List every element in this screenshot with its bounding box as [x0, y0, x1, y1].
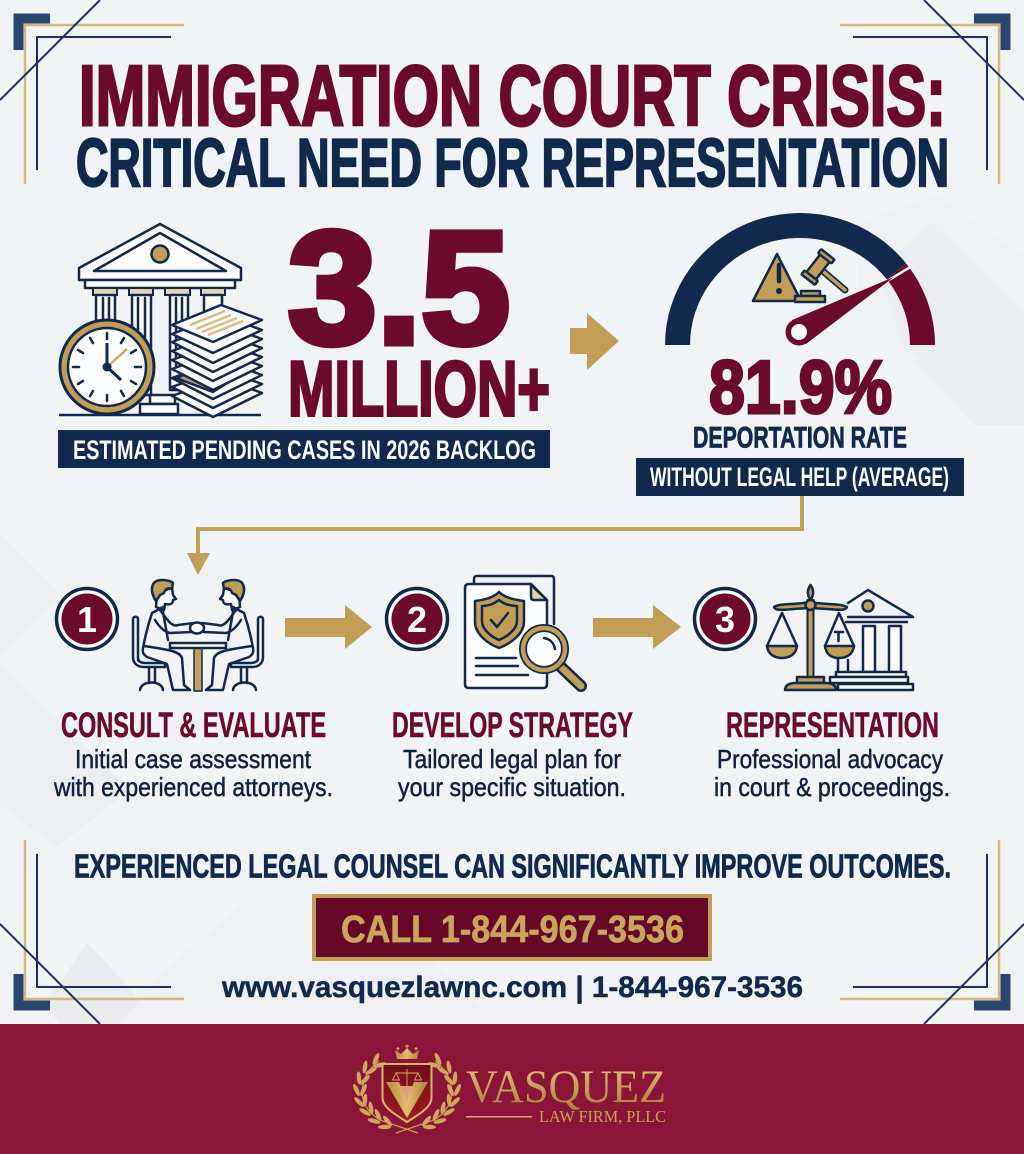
stat: 81.9% deportation rate: [693, 345, 907, 454]
small courthouse: [830, 590, 913, 690]
corner frame: bottom right: [840, 840, 1024, 1024]
step 2 text: your specific situation.: [398, 772, 626, 802]
step 2 badge: [386, 588, 448, 650]
clasped hands: [190, 622, 204, 634]
step 3 badge: 3: [715, 599, 735, 640]
scales: [767, 585, 854, 690]
right person: [202, 580, 263, 690]
call button: CALL 1-844-967-3536: [341, 909, 684, 951]
corner frame: top right: [840, 0, 1024, 184]
step 1 text: [53, 706, 333, 802]
step 3 text: in court & proceedings.: [714, 772, 950, 802]
step 1 badge: 1: [77, 599, 97, 640]
paper stack: [172, 305, 262, 417]
courthouse: [79, 224, 241, 414]
step 1 text: Initial case assessment: [75, 744, 312, 774]
step 3 text: [714, 706, 950, 802]
step 1 text: CONSULT & EVALUATE: [61, 706, 326, 745]
banner: estimated pending cases: [58, 430, 550, 468]
step 3 badge: [694, 588, 756, 650]
step 1 badge: [56, 588, 118, 650]
icon: scales of justice and courthouse: [767, 585, 913, 690]
firm name: VASQUEZ: [466, 1061, 666, 1113]
ground line: [59, 414, 261, 416]
clock: [60, 320, 154, 414]
gauge arc: red: [896, 271, 922, 345]
needle: [786, 277, 894, 346]
gauge arc: navy: [678, 226, 896, 345]
stat: 81.9% deportation rate: DEPORTATION RATE: [693, 422, 907, 454]
arrow: step 1 to 2: [285, 605, 372, 649]
step 2 text: Tailored legal plan for: [403, 744, 621, 774]
big number: 3.5 million+: MILLION+: [288, 344, 550, 432]
step 2 badge: 2: [407, 599, 427, 640]
laurel right: [396, 1052, 462, 1133]
gauge: [678, 226, 922, 346]
website and phone: www.vasquezlawnc.com | 1-844-967-3536: [221, 971, 803, 1004]
arrow: step 2 to 3: [593, 605, 681, 649]
table: [170, 643, 226, 691]
banner: estimated pending cases: ESTIMATED PENDING CASES IN 2026 BACKLOG: [73, 435, 536, 465]
icon: handshake at table: [133, 580, 263, 691]
arrow: stat to gauge: [570, 313, 619, 370]
icon: courthouse, clock and paper stack: [59, 224, 262, 417]
shield scales and column: [392, 1069, 422, 1102]
big number: 3.5 million+: [288, 198, 550, 432]
magnifier: [523, 628, 581, 686]
logo: [352, 1044, 462, 1133]
step 2 text: [392, 706, 633, 802]
step 2 text: DEVELOP STRATEGY: [392, 706, 633, 745]
step 3 text: Professional advocacy: [717, 744, 943, 774]
big number: 3.5 million+: 3.5: [288, 198, 510, 377]
connector arrow to steps: [187, 496, 802, 575]
icon: document, shield and magnifier: [465, 576, 581, 688]
shield: [382, 1064, 432, 1122]
shield V: [386, 1082, 428, 1118]
firm name: LAW FIRM, PLLC: [539, 1107, 666, 1126]
footer band: [0, 1024, 1024, 1154]
left person: [133, 580, 194, 690]
corner frame: bottom left: [0, 840, 184, 1024]
banner: without legal help: [636, 458, 964, 496]
icon: warning triangle: [753, 254, 801, 301]
stat: 81.9% deportation rate: 81.9%: [709, 345, 892, 429]
crown: [395, 1044, 419, 1059]
call button: [314, 896, 710, 959]
corner frame: top left: [0, 0, 184, 184]
icon: gavel: [795, 249, 845, 302]
laurel left: [352, 1052, 418, 1133]
shield: [475, 592, 524, 648]
title: [76, 49, 949, 201]
step 1 text: with experienced attorneys.: [53, 772, 333, 802]
